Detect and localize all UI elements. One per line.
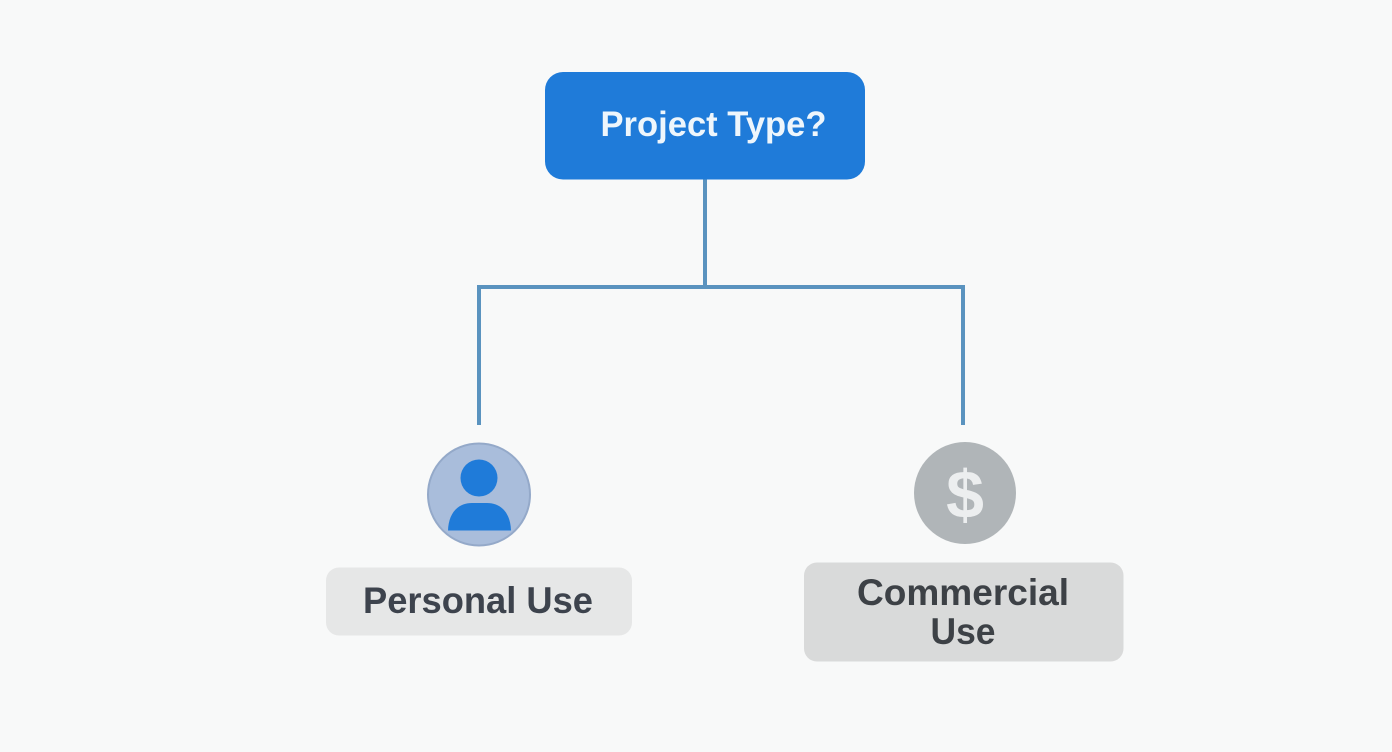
- label: Commercial Use: Use: [930, 611, 996, 652]
- icon: dollar sign: $: [946, 457, 984, 533]
- decision box: Project Type?: [545, 72, 865, 180]
- connector lines: decision tree: [479, 179, 963, 425]
- label: Commercial Use: Commercial: [857, 572, 1069, 613]
- label: Commercial Use: [804, 562, 1124, 662]
- icon: dollar sign: [914, 442, 1016, 544]
- icon: person: [428, 444, 530, 546]
- decision box: Project Type?: Project Type?: [600, 105, 826, 144]
- label: Personal Use: [326, 568, 632, 636]
- label: Personal Use: Personal Use: [363, 580, 593, 621]
